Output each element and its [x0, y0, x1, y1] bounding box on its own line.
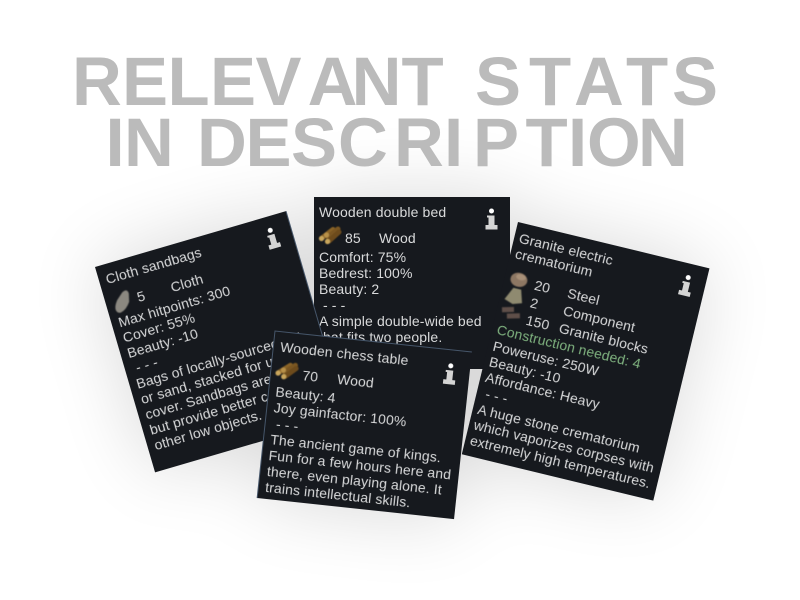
panel: wooden chess table: Fun for a few hours here and	[268, 447, 452, 482]
icon: info	[443, 363, 457, 385]
icon: info	[486, 208, 498, 230]
panel: granite electric crematorium: crematorium	[514, 246, 594, 280]
panel: wooden double bed	[314, 197, 510, 369]
panel: wooden double bed: Comfort: 75%	[319, 249, 406, 265]
panel: granite electric crematorium: 150	[524, 312, 551, 333]
panel: granite electric crematorium: A huge stone crematorium	[476, 401, 642, 456]
panel: granite electric crematorium: which vaporizes corpses with	[471, 416, 656, 476]
panel: granite electric crematorium: - - -	[484, 385, 510, 406]
title	[72, 43, 718, 181]
panel: granite electric crematorium: 2	[529, 294, 540, 312]
panel: cloth sandbags: 5	[135, 287, 147, 305]
panel: wooden double bed: A simple double-wide bed	[319, 313, 482, 329]
panel: wooden double bed: 85	[345, 230, 361, 246]
panel: cloth sandbags	[95, 211, 346, 472]
icon: wood logs	[275, 363, 296, 380]
panel: wooden chess table: trains intellectual skills.	[265, 479, 411, 510]
title: IN DESCRIPTION	[106, 104, 688, 181]
soft shadow behind cards	[95, 197, 709, 521]
panel: cloth sandbags: Beauty: -10	[125, 325, 200, 361]
icon: sandbag	[111, 290, 133, 314]
panel: granite electric crematorium: extremely high temperatures.	[469, 432, 652, 491]
panel: cloth sandbags: or sand, stacked for use as	[139, 344, 308, 407]
panel: granite electric crematorium: Beauty: -10	[488, 353, 562, 386]
panel: granite electric crematorium: Steel	[566, 285, 601, 308]
panel: granite electric crematorium: 20	[533, 277, 552, 296]
panel: cloth sandbags: Bags of locally-sourced dirt	[134, 328, 304, 392]
panel: wooden chess table: Joy gainfactor: 100%	[273, 399, 407, 429]
panel: wooden double bed: Wooden double bed	[319, 204, 446, 220]
icon: wood logs	[319, 229, 339, 244]
title: RELEVANT STATS	[72, 43, 718, 120]
panel: granite electric crematorium: Construction needed: 4	[495, 321, 643, 372]
panel: wooden double bed: Wood	[379, 230, 416, 246]
icon: granite blocks	[500, 304, 522, 322]
panel: wooden double bed: Beauty: 2	[319, 281, 379, 297]
panel: wooden chess table: Beauty: 4	[275, 383, 336, 406]
panel: granite electric crematorium	[462, 222, 709, 501]
panel: cloth sandbags: Cover: 55%	[121, 309, 197, 346]
icon: steel	[509, 271, 529, 289]
panel: cloth sandbags: cover. Sandbags are short	[143, 360, 308, 422]
panel: cloth sandbags: but provide better cover than	[148, 371, 327, 438]
panel: cloth sandbags: Max hitpoints: 300	[116, 282, 232, 330]
panel: cloth sandbags: - - -	[134, 354, 160, 375]
icon: component	[504, 286, 525, 306]
icon: info	[264, 226, 281, 250]
panel: granite electric crematorium: Component	[562, 302, 637, 335]
panel: wooden double bed: Bedrest: 100%	[319, 265, 413, 281]
panel: granite electric crematorium: Affordance: Heavy	[484, 369, 601, 412]
panel: granite electric crematorium: Granite electric	[517, 230, 615, 268]
panel: wooden double bed: that fits two people.	[319, 329, 442, 345]
panel: cloth sandbags: other low objects.	[152, 407, 264, 453]
panel: granite electric crematorium: Granite blocks	[557, 320, 650, 357]
panel: wooden chess table: 70	[302, 367, 319, 385]
panel: wooden chess table: Wood	[336, 371, 375, 391]
panel: cloth sandbags: Cloth	[169, 271, 205, 295]
panel: wooden double bed: - - -	[323, 297, 346, 313]
panel: wooden chess table: Wooden chess table	[280, 339, 410, 368]
panel: cloth sandbags: Cloth sandbags	[104, 244, 203, 287]
panel: wooden chess table: there, even playing alone. It	[266, 463, 443, 498]
panel: wooden chess table: - - -	[275, 416, 300, 434]
icon: info	[678, 274, 695, 297]
panel: wooden chess table: The ancient game of kings.	[270, 431, 442, 465]
panel: granite electric crematorium: Poweruse: 250W	[491, 338, 601, 379]
panel: wooden chess table	[257, 331, 472, 519]
